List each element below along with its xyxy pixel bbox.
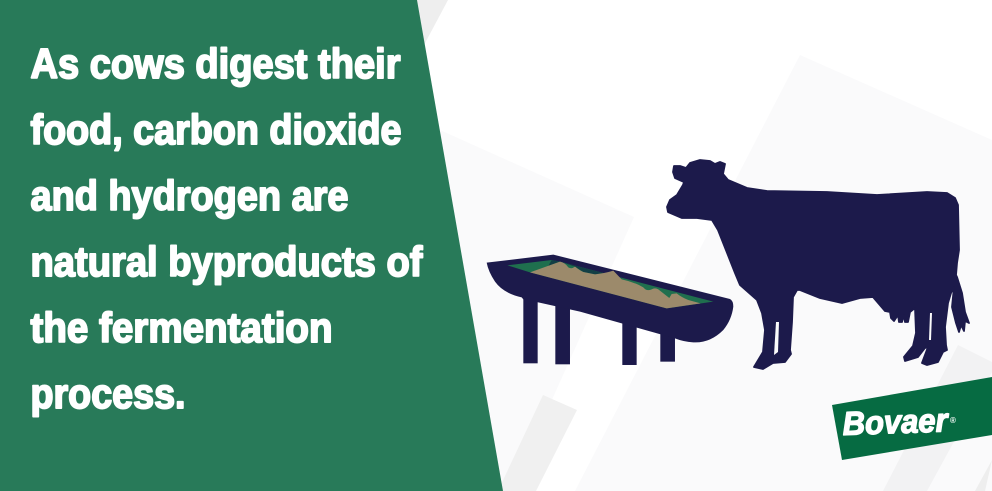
feed pile: [530, 262, 701, 308]
logo wordmark: Bovaer: [842, 401, 950, 442]
logo green banner: [832, 377, 992, 460]
trough green lining: [507, 260, 713, 308]
trough lining shadow: [548, 260, 613, 276]
trough legs: [523, 297, 675, 365]
gap between front legs: [774, 322, 779, 355]
panel: green text panel: [0, 0, 503, 491]
logo registered mark: ®: [950, 416, 956, 425]
text block: main statement: process.: [30, 370, 186, 417]
text block: main statement: [30, 40, 423, 417]
icon: cow silhouette: [667, 160, 969, 369]
text block: main statement: food, carbon dioxide: [30, 106, 402, 153]
trough body: [487, 255, 733, 342]
text block: main statement: and hydrogen are: [30, 172, 348, 219]
gap between hind legs: [929, 313, 932, 340]
text block: main statement: As cows digest their: [30, 40, 400, 87]
cow body: [667, 160, 969, 369]
logo: Bovaer: [832, 377, 992, 460]
text block: main statement: natural byproducts of: [30, 238, 423, 285]
icon: feed trough: [487, 255, 733, 365]
text block: main statement: the fermentation: [30, 304, 332, 351]
